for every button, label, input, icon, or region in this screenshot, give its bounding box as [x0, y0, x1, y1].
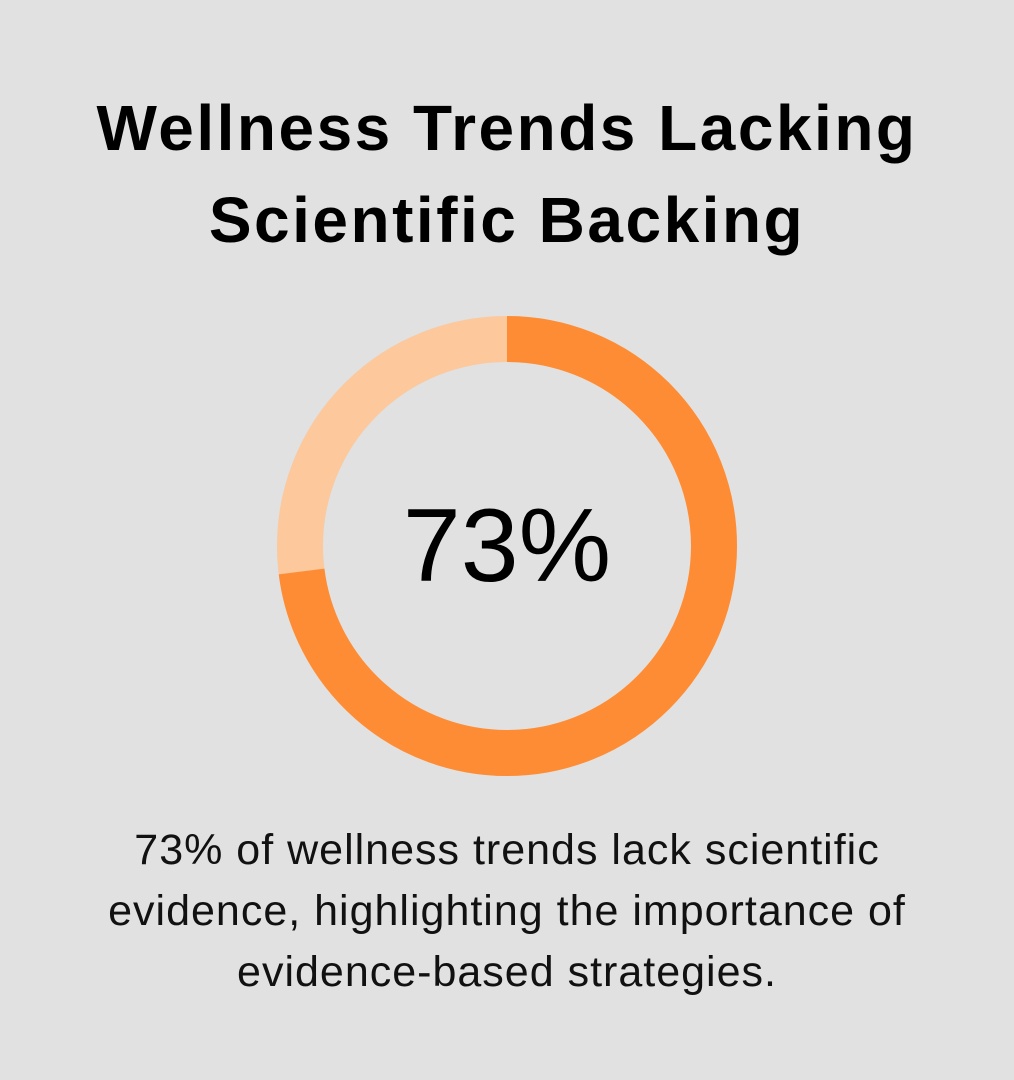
caption: evidence, highlighting the importance of [108, 887, 906, 935]
donut chart: 73% [403, 488, 611, 604]
caption: evidence-based strategies. [237, 948, 777, 996]
title: Wellness Trends Lacking [96, 92, 918, 164]
caption [108, 826, 906, 996]
title: Scientific Backing [209, 184, 805, 256]
caption: 73% of wellness trends lack scientific [134, 826, 880, 874]
title [96, 92, 918, 256]
